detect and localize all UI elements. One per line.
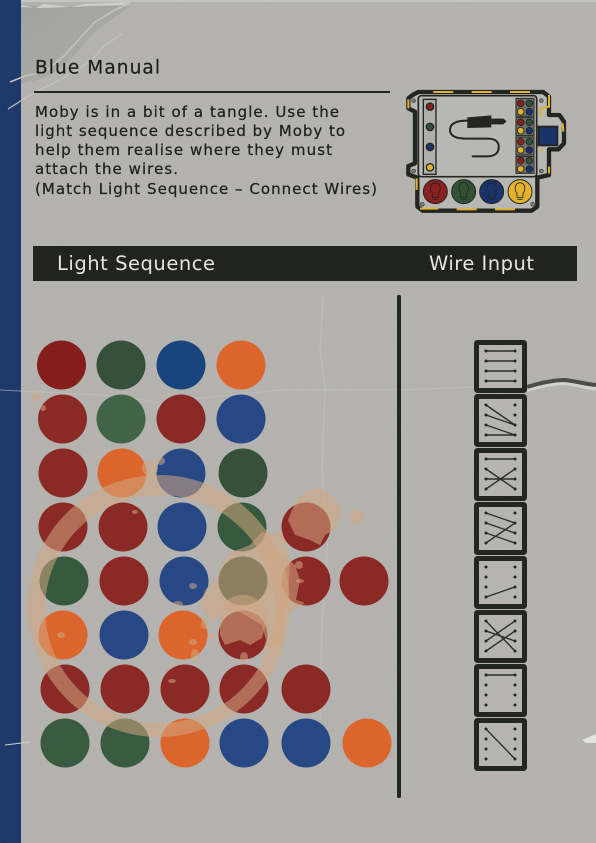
divider bar [397, 295, 401, 798]
text block: instructions: (Match Light Sequence – Connect Wires) [35, 180, 377, 198]
text block: instructions: help them realise where they must [35, 141, 332, 159]
icon: device box with wire and bulbs [408, 92, 564, 211]
wire box 3 [476, 450, 524, 498]
wire box 4 [476, 504, 524, 552]
header bar [33, 246, 577, 281]
coffee stain [28, 392, 364, 737]
text block: instructions [35, 103, 377, 198]
wire input column [476, 342, 524, 768]
title: Blue Manual [35, 58, 160, 78]
chart: light sequence circles [37, 340, 392, 768]
text block: instructions: Moby is in a bit of a tangle. Use the [35, 103, 339, 121]
wire box 5 [476, 558, 524, 606]
text block: instructions: light sequence described by Moby to [35, 122, 345, 140]
wire box 2 [476, 396, 524, 444]
wire box 6 [476, 612, 524, 660]
header bar: Wire Input [429, 252, 534, 275]
wire box 8 [476, 720, 524, 768]
text block: instructions: attach the wires. [35, 160, 178, 178]
wire box 7 [476, 666, 524, 714]
heading: light sequence: Light Sequence [57, 252, 215, 275]
wire box 1 [476, 342, 524, 390]
